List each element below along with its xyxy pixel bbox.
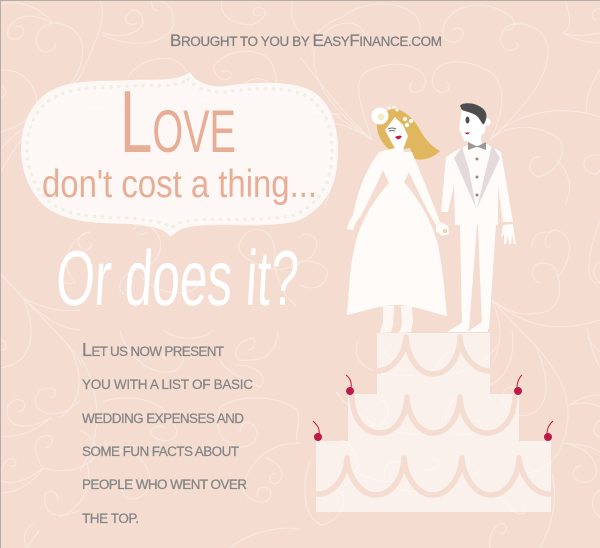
cake tiers bbox=[316, 333, 551, 512]
top tier icing bbox=[377, 337, 490, 374]
intro paragraph: SOME FUN FACTS ABOUT bbox=[82, 444, 239, 459]
left flourish bbox=[0, 273, 31, 368]
mouth bbox=[465, 132, 470, 134]
swirls behind badge bbox=[0, 108, 148, 170]
wedding ring bbox=[444, 230, 446, 232]
ear bbox=[483, 118, 491, 126]
badge dotted outline bbox=[27, 79, 332, 228]
heading: love: LOVE bbox=[120, 72, 236, 171]
lapels bbox=[454, 145, 500, 208]
face bbox=[385, 117, 408, 150]
dress bbox=[347, 148, 447, 316]
brought to you by: BROUGHT TO YOU BY EASYFINANCE.COM bbox=[170, 31, 442, 50]
eye bbox=[466, 116, 470, 124]
neck and head bbox=[459, 108, 486, 147]
bride bbox=[347, 106, 447, 333]
right hand bbox=[501, 224, 516, 244]
hair bbox=[460, 103, 487, 124]
shoes bbox=[447, 322, 488, 332]
lips bbox=[395, 136, 402, 139]
intro paragraph: YOU WITH A LIST OF BASIC bbox=[82, 377, 253, 392]
jacket bbox=[441, 144, 513, 225]
middle text-area flourishes bbox=[120, 330, 184, 372]
trousers bbox=[460, 224, 496, 329]
intro paragraph: THE TOP. bbox=[82, 511, 139, 526]
middle tier icing bbox=[352, 397, 515, 433]
heading: or does it: Or does it? bbox=[54, 234, 301, 322]
groom bbox=[436, 103, 516, 332]
swirls around question bbox=[79, 232, 92, 250]
intro paragraph bbox=[82, 340, 253, 526]
badge shape bbox=[21, 72, 338, 237]
heading: don't cost a thing: don't cost a thing... bbox=[42, 163, 317, 206]
speech badge bbox=[21, 72, 338, 237]
cherries bbox=[313, 375, 553, 441]
intro paragraph: LET US NOW PRESENT bbox=[82, 340, 224, 360]
swirls on cake area bbox=[356, 340, 497, 376]
buttons bbox=[476, 158, 478, 196]
hair back bbox=[377, 109, 440, 160]
intro paragraph: WEDDING EXPENSES AND bbox=[82, 411, 244, 426]
hair flower bbox=[372, 108, 388, 124]
wedding cake bbox=[313, 333, 553, 512]
pearls bbox=[388, 106, 413, 127]
left hand bbox=[436, 222, 449, 236]
top-left flourishes bbox=[0, 2, 52, 23]
right lower flourish bbox=[492, 263, 560, 314]
intro paragraph: PEOPLE WHO WENT OVER bbox=[82, 477, 247, 492]
closed eye bbox=[388, 128, 396, 131]
bow tie bbox=[468, 142, 486, 150]
bottom tier icing bbox=[318, 458, 549, 495]
shoes bbox=[380, 306, 413, 333]
